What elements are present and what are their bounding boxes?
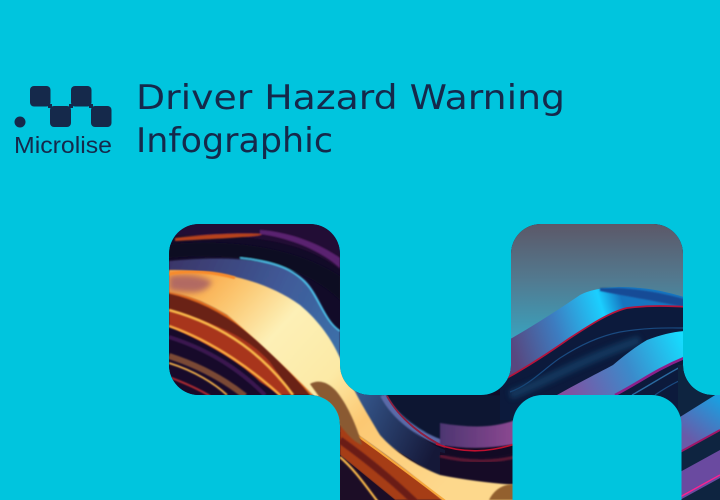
icon: logo squares xyxy=(14,86,112,128)
title line 1: Driver Hazard Warning xyxy=(136,78,565,118)
gold ribbon xyxy=(169,270,530,500)
second blue ribbon xyxy=(557,331,684,395)
title line 2: Infographic xyxy=(136,121,333,161)
logo wordmark: Microlise xyxy=(14,132,112,158)
left panel upper bands xyxy=(169,224,340,372)
sky of right panel xyxy=(511,224,683,349)
cyan rounded block xyxy=(512,395,682,500)
logo: Microlise xyxy=(14,86,112,158)
abstract ribbon artwork panel xyxy=(160,215,720,500)
lower left dark with orange streaks xyxy=(169,366,340,424)
title xyxy=(136,78,565,161)
far right ribbons xyxy=(678,365,720,500)
lower middle dark ribbons xyxy=(340,395,720,500)
right panel ribbons xyxy=(502,287,683,386)
lower orange streaks xyxy=(340,423,450,500)
gold ribbon shadow and blush xyxy=(169,275,212,292)
